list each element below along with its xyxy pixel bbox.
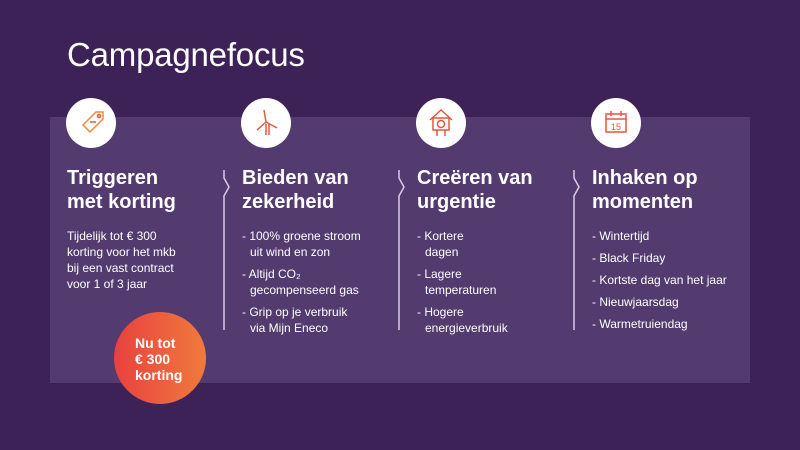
column 2: list: uit wind en zon [250, 245, 330, 259]
column 2: heading: zekerheid [242, 191, 334, 213]
column 4: list: - Wintertijd [592, 229, 649, 243]
column 2: list [242, 229, 361, 335]
column 1: text [67, 229, 176, 291]
column 4: list: - Warmetruiendag [592, 317, 688, 331]
callout: discount badge: € 300 [135, 351, 170, 367]
column 1: text: bij een vast contract [67, 261, 174, 275]
column 4: list: - Kortste dag van het jaar [592, 273, 727, 287]
callout: discount badge: korting [135, 367, 182, 383]
column 2: list: - Grip op je verbruik [242, 305, 347, 319]
column 3: heading [417, 167, 533, 213]
column 3: list: - Lagere [417, 267, 462, 281]
icon: price tag [66, 98, 116, 148]
icon: calendar [591, 98, 641, 148]
icon: cuckoo clock [416, 98, 466, 148]
column 3: list [417, 229, 508, 335]
column 3: heading: Creëren van [417, 167, 533, 189]
divider arrow 2 [398, 170, 405, 330]
divider arrow 3 [573, 170, 580, 330]
column 4: heading [592, 167, 698, 213]
column 2: list: via Mijn Eneco [250, 321, 328, 335]
column 2: list: gecompenseerd gas [250, 283, 359, 297]
column 3: list: - Kortere [417, 229, 464, 243]
column 3: list: energieverbruik [425, 321, 508, 335]
column 1: text: Tijdelijk tot € 300 [67, 229, 157, 243]
column 2: heading: Bieden van [242, 167, 349, 189]
icon: calendar: 15 [611, 122, 621, 132]
column 3: list: dagen [425, 245, 458, 259]
title: Campagnefocus [67, 36, 305, 73]
divider arrow 1 [223, 170, 230, 330]
column 1: text: korting voor het mkb [67, 245, 176, 259]
column 4: list: - Nieuwjaarsdag [592, 295, 679, 309]
icon: wind turbine [241, 98, 291, 148]
column 3: list: temperaturen [425, 283, 496, 297]
column 4: heading: Inhaken op [592, 167, 698, 189]
column 4: heading: momenten [592, 191, 693, 213]
column 2: list: - Altijd CO₂ [242, 267, 301, 281]
panel background [50, 117, 750, 383]
column 4: list [592, 229, 727, 331]
column 3: list: - Hogere [417, 305, 464, 319]
column 4: list: - Black Friday [592, 251, 665, 265]
column 3: heading: urgentie [417, 191, 496, 213]
callout: discount badge [114, 312, 206, 404]
callout: discount badge: Nu tot [135, 335, 175, 351]
column 1: heading: met korting [67, 191, 176, 213]
column 1: text: voor 1 of 3 jaar [67, 277, 147, 291]
column 2: list: - 100% groene stroom [242, 229, 361, 243]
column 2: heading [242, 167, 349, 213]
column 1: heading: Triggeren [67, 167, 158, 189]
column 1: heading [67, 167, 176, 213]
